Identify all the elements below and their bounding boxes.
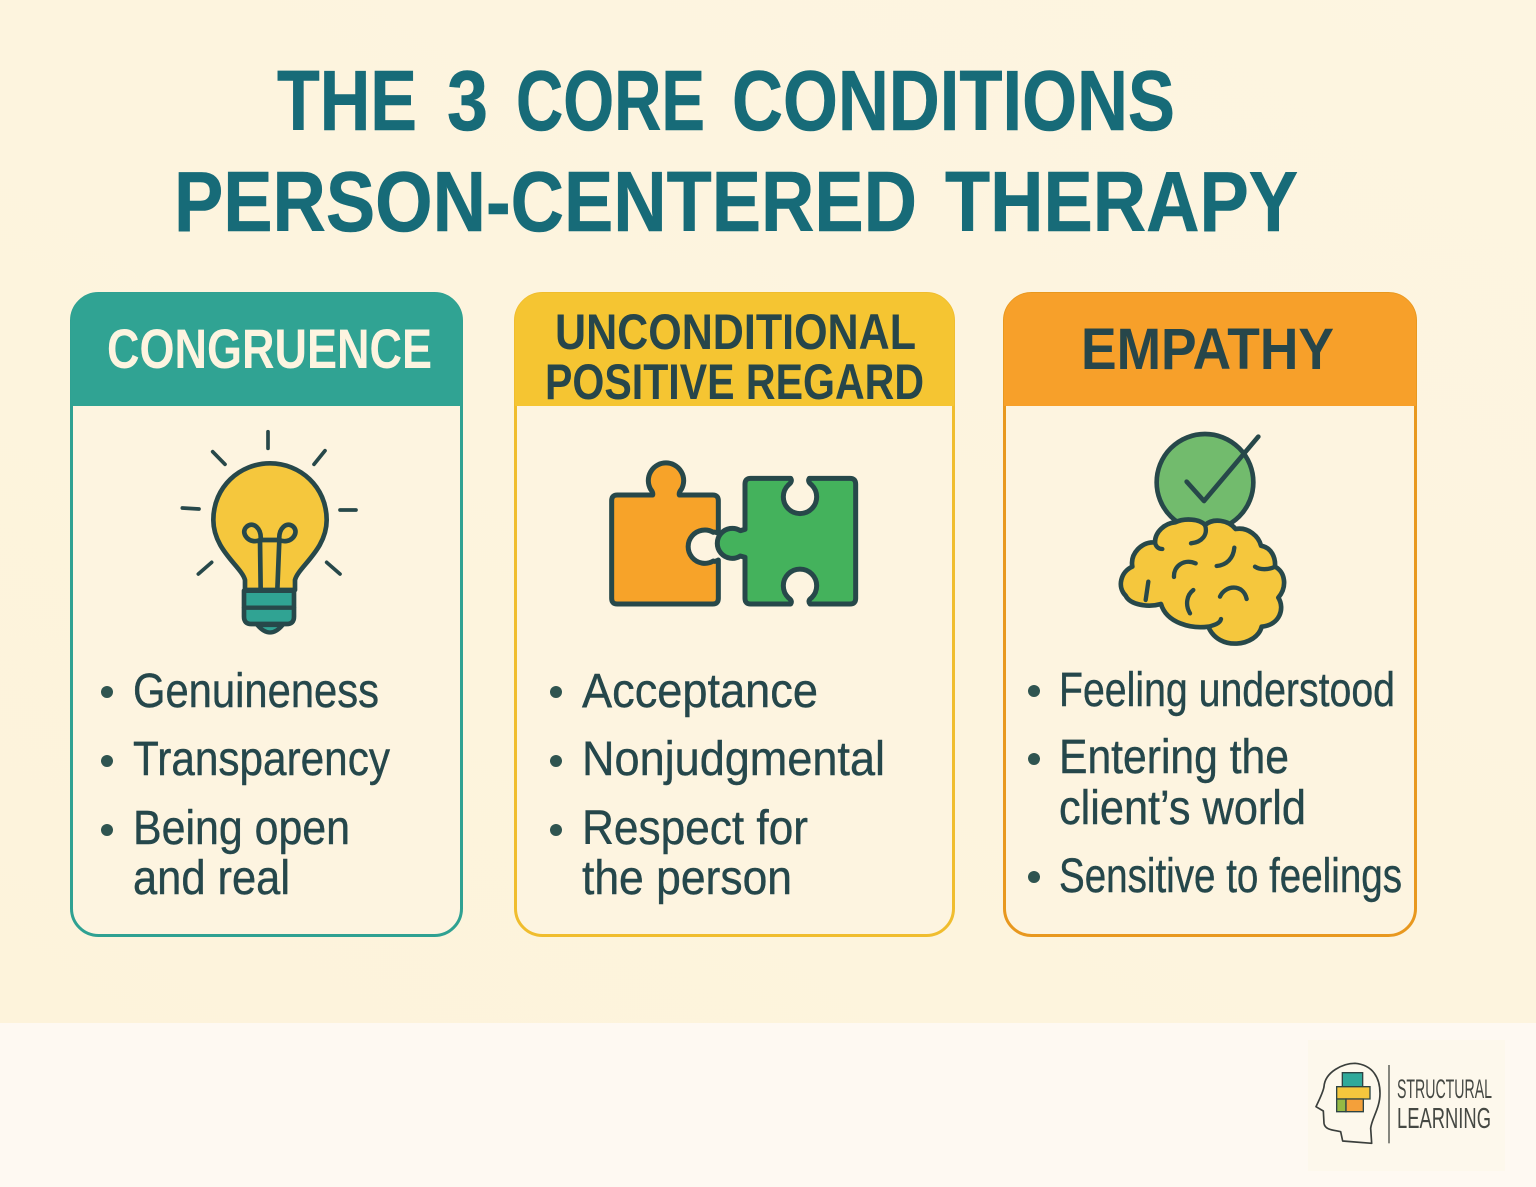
title: PERSON-CENTERED [174,155,917,250]
bullet list: unconditional positive regard: Respect for [582,802,808,855]
panel: unconditional positive regard [515,293,954,936]
logo wordmark [1397,1074,1492,1135]
icon: puzzle pieces [612,463,856,604]
bullet list: empathy: Entering the [1059,731,1289,784]
bullet list: unconditional positive regard [550,665,885,905]
bullet list: congruence: Transparency [133,733,390,786]
title: CONDITIONS [732,54,1175,149]
logo: structural learning [1308,1040,1505,1171]
header: unconditional positive regard: POSITIVE REGARD [545,354,924,410]
bullet list: unconditional positive regard: Nonjudgmental [582,733,885,786]
bullet list: congruence: Genuineness [133,665,379,718]
bullet list: congruence: Being open [133,802,350,855]
bullet list: empathy: Feeling understood [1059,664,1395,717]
bullet list: congruence [101,665,390,905]
header: congruence [71,293,462,406]
panel: congruence [71,293,462,936]
icon: light bulb [182,432,356,632]
icon: head with blocks [1316,1063,1389,1143]
header: unconditional positive regard: UNCONDITIONAL [555,304,916,360]
bullet list: unconditional positive regard: the person [582,852,792,905]
bullet list: congruence: and real [133,852,290,905]
bullet list: empathy: Sensitive to feelings [1059,850,1402,903]
icon: brain with check mark [1121,434,1284,644]
title: THERAPY [945,155,1298,250]
bullet list: empathy [1028,664,1402,903]
title [174,54,1298,250]
header: empathy: EMPATHY [1081,317,1334,382]
header: empathy [1004,293,1416,406]
header: congruence: CONGRUENCE [107,317,432,380]
panel: empathy [1004,293,1416,936]
title: CORE [516,54,705,149]
title: THE [277,54,417,149]
bullet list: unconditional positive regard: Acceptance [582,665,818,718]
header: unconditional positive regard [515,293,954,410]
bullet list: empathy: client’s world [1059,782,1306,835]
title: 3 [447,54,488,149]
